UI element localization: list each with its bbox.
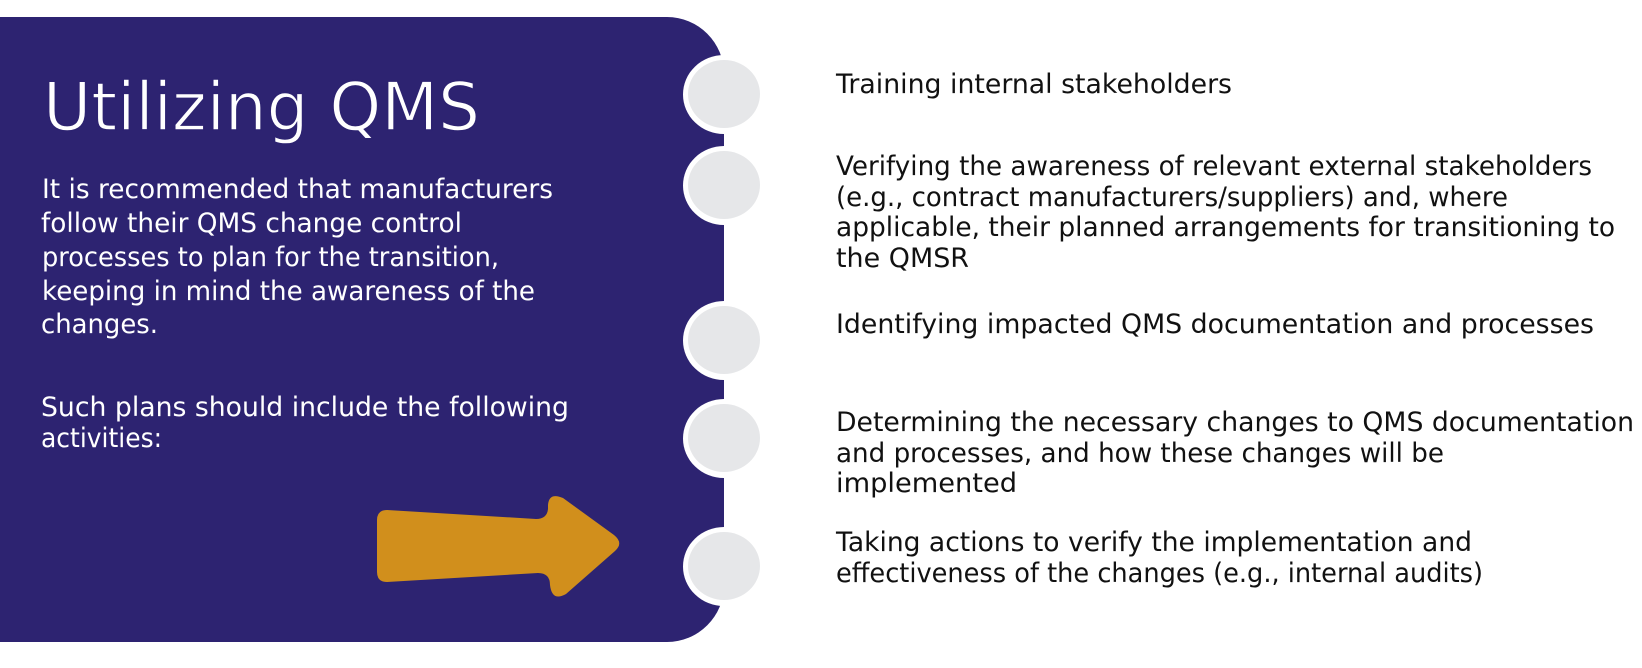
activity 5	[835, 527, 1483, 589]
activity 4	[836, 407, 1634, 499]
activity 5: Taking actions to verify the implementation and	[835, 527, 1472, 558]
activity 5: effectiveness of the changes (e.g., internal audits)	[836, 558, 1483, 589]
intro paragraph: follow their QMS change control	[41, 208, 462, 239]
activities lead-in paragraph: activities:	[41, 423, 162, 454]
activity 2	[836, 151, 1615, 274]
intro paragraph: keeping in mind the awareness of the	[42, 276, 535, 307]
marker 2	[683, 146, 765, 225]
activities lead-in paragraph	[41, 392, 569, 454]
intro paragraph	[41, 174, 553, 340]
intro paragraph: It is recommended that manufacturers	[42, 174, 553, 205]
intro paragraph: processes to plan for the transition,	[42, 242, 499, 273]
activity 3: Identifying impacted QMS documentation and processes	[836, 309, 1594, 340]
title: Utilizing QMS	[43, 68, 480, 146]
activity 1: Training internal stakeholders	[835, 69, 1232, 100]
activities lead-in paragraph: Such plans should include the following	[41, 392, 569, 423]
activity 4: and processes, and how these changes will be	[836, 438, 1444, 469]
marker 4	[683, 399, 765, 478]
marker 3	[683, 301, 765, 380]
activity 2: the QMSR	[836, 243, 969, 274]
activity 4: implemented	[836, 468, 1017, 499]
panel background	[0, 17, 724, 642]
panel: Utilizing QMS	[0, 17, 724, 642]
activity 2: (e.g., contract manufacturers/suppliers) and, where	[836, 182, 1508, 213]
marker 1	[683, 55, 765, 134]
activity 2: Verifying the awareness of relevant external stakeholders	[836, 151, 1592, 182]
activity 2: applicable, their planned arrangements for transitioning to	[836, 212, 1615, 243]
activity list	[835, 69, 1634, 589]
marker 5	[683, 527, 765, 606]
arrow pointing to list	[377, 496, 619, 597]
intro paragraph: changes.	[41, 309, 158, 340]
bullet markers	[683, 55, 765, 606]
activity 4: Determining the necessary changes to QMS documentation	[836, 407, 1634, 438]
